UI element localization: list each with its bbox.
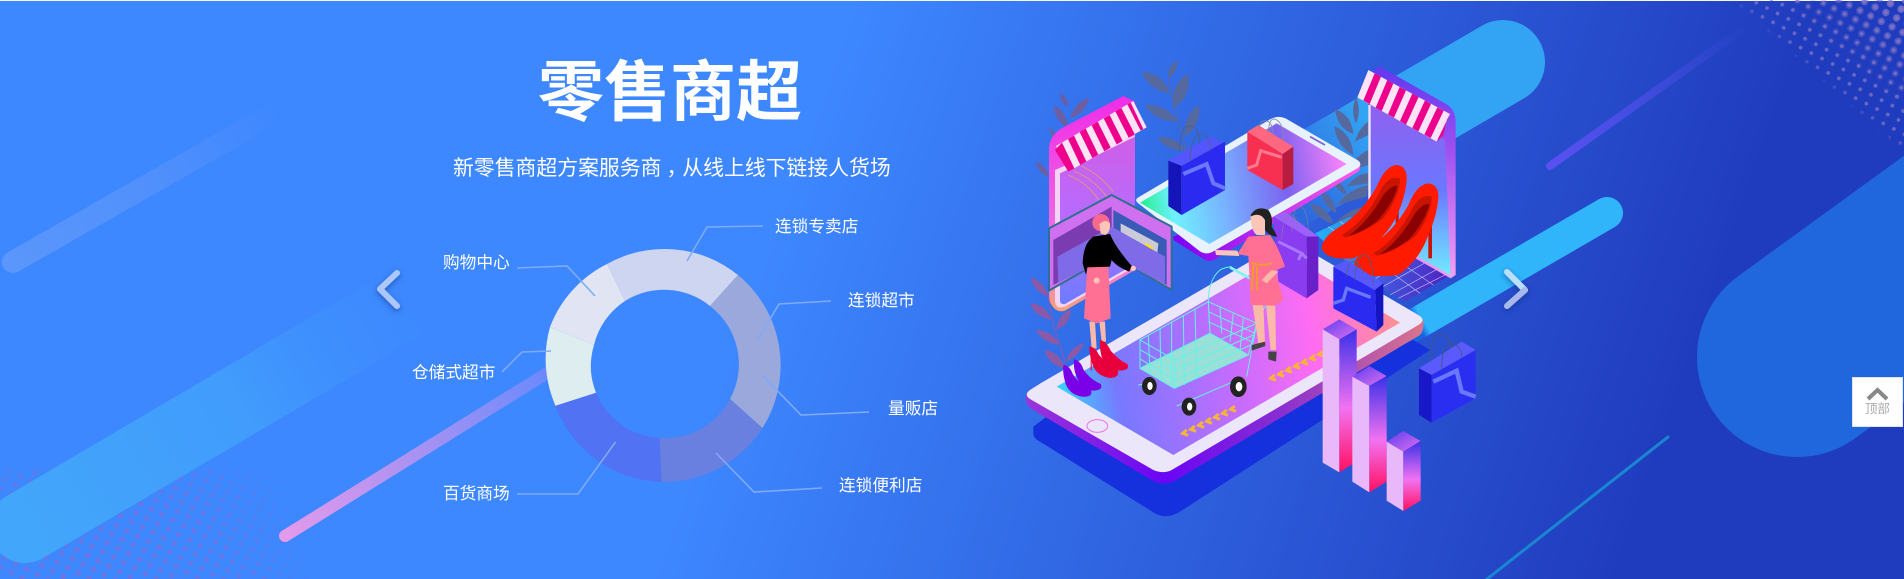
purple shopping bag <box>1273 206 1318 298</box>
top edge line <box>0 0 1904 1</box>
arrow: previous <box>380 273 397 306</box>
upper phone <box>1136 117 1360 261</box>
woman in pink dress <box>1215 208 1285 362</box>
donut labels: 连锁便利店 <box>839 476 922 495</box>
decoration: faint streak left <box>13 107 285 262</box>
segment: 量贩店 / 连锁便利店 <box>660 399 762 482</box>
donut labels: 百货商场 <box>443 484 510 503</box>
segment: 购物中心 <box>550 264 625 345</box>
decoration: dots top right <box>1732 0 1904 146</box>
back to top button <box>1852 378 1902 426</box>
plant: right back <box>1310 97 1368 225</box>
title: 零售商超 <box>538 55 802 129</box>
segment: 百货商场 <box>556 393 662 482</box>
leader lines <box>502 226 869 494</box>
lower phone <box>1026 242 1423 484</box>
back to top button: 顶部 <box>1865 401 1890 416</box>
bar: short <box>1387 431 1421 511</box>
subtitle: 新零售商超方案服务商，从线上线下链接人货场 <box>453 157 891 180</box>
plant: lower left <box>1030 277 1084 368</box>
lower phone shadow <box>1033 340 1430 516</box>
donut chart <box>546 249 781 482</box>
decoration: dots bottom left <box>0 470 320 579</box>
chevrons <box>1183 351 1324 435</box>
left store awning <box>1055 101 1147 172</box>
blue bag lower <box>1333 255 1383 332</box>
donut labels: 连锁超市 <box>848 291 915 310</box>
wallet <box>1049 195 1172 291</box>
decoration: pill top <box>1290 62 1503 186</box>
decoration: purple streak <box>1550 26 1747 166</box>
decoration: large pill right <box>1797 137 1904 357</box>
purple heels small <box>1063 359 1101 397</box>
red heels small <box>1089 340 1128 378</box>
cart wheels <box>1142 376 1247 416</box>
segment: 连锁专卖店 <box>607 249 738 306</box>
woman in black top <box>1083 214 1136 348</box>
right store floor <box>1315 217 1450 302</box>
cart <box>1138 267 1272 406</box>
decoration: cyan streak <box>1487 437 1668 579</box>
segment: 连锁超市 <box>710 275 781 428</box>
red high heels large <box>1322 165 1438 276</box>
red bag <box>1247 119 1293 190</box>
decoration: big streak left <box>25 277 450 527</box>
blue bag lower right <box>1419 334 1476 423</box>
donut labels: 连锁专卖店 <box>775 217 858 236</box>
decoration: pill middle <box>1290 213 1607 397</box>
blue bag upper <box>1168 126 1225 215</box>
segment: 仓储式超市 <box>546 327 596 406</box>
decoration: pink streak <box>285 365 560 536</box>
donut labels: 仓储式超市 <box>412 363 495 382</box>
illustration: isometric shopping scene <box>1026 60 1476 516</box>
plant: center back <box>1142 60 1199 150</box>
donut labels: 量贩店 <box>888 399 938 418</box>
left store <box>1049 96 1135 311</box>
donut labels: 购物中心 <box>443 253 510 272</box>
right store <box>1368 67 1456 278</box>
donut labels <box>412 217 938 503</box>
plant: left back <box>1036 93 1089 177</box>
bar: tall <box>1323 319 1357 472</box>
bar: medium <box>1352 366 1387 492</box>
arrow: next <box>1507 272 1525 306</box>
right store awning <box>1357 70 1450 142</box>
